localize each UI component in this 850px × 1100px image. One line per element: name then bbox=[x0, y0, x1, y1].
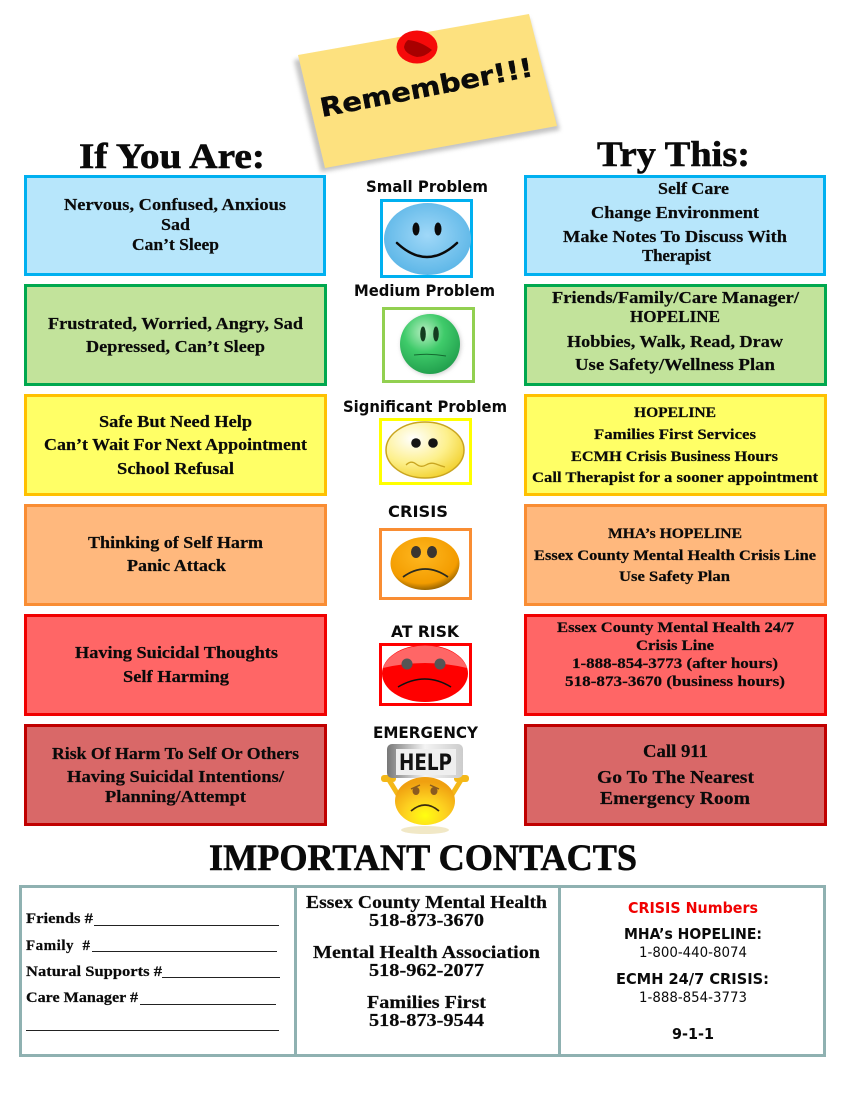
panel: at risk feelings: Having Suicidal Thoughts bbox=[75, 643, 278, 662]
write-in contacts list: Family # bbox=[26, 938, 90, 954]
icon: blue smiling face bbox=[382, 200, 472, 276]
panel: medium problem actions: Hobbies, Walk, Read, Draw bbox=[567, 332, 784, 351]
write-in contacts list bbox=[26, 911, 280, 1031]
panel: significant problem actions: HOPELINE bbox=[634, 405, 716, 421]
icon: help sign face bbox=[381, 744, 469, 834]
panel: at risk actions bbox=[526, 616, 826, 714]
panel: significant problem feelings: School Refusal bbox=[117, 459, 234, 478]
panel: emergency actions: Emergency Room bbox=[600, 788, 750, 808]
panel: small problem feelings: Nervous, Confused, Anxious bbox=[64, 195, 286, 214]
local agency contacts: 518-873-9544 bbox=[369, 1010, 484, 1030]
panel: medium problem actions: Friends/Family/Care Manager/ bbox=[552, 288, 799, 307]
label: CRISIS: CRISIS bbox=[388, 502, 448, 521]
panel: crisis feelings bbox=[26, 506, 326, 604]
panel: small problem actions: Make Notes To Discuss With bbox=[563, 227, 788, 246]
panel: emergency actions: Go To The Nearest bbox=[597, 767, 754, 787]
panel: small problem actions bbox=[526, 176, 824, 274]
crisis numbers: ECMH 24/7 CRISIS: bbox=[616, 970, 769, 988]
panel: small problem actions: Change Environment bbox=[591, 203, 759, 222]
panel: medium problem feelings: Depressed, Can’t Sleep bbox=[86, 337, 265, 356]
panel: small problem feelings: Sad bbox=[161, 215, 191, 234]
write-in contacts list: Natural Supports # bbox=[26, 964, 163, 980]
panel: crisis feelings: Thinking of Self Harm bbox=[88, 533, 263, 552]
local agency contacts: 518-873-3670 bbox=[369, 910, 484, 930]
panel: crisis feelings: Panic Attack bbox=[127, 556, 227, 575]
panel: medium problem feelings bbox=[26, 286, 326, 384]
panel: small problem feelings bbox=[26, 176, 324, 274]
panel: significant problem actions: Families First Services bbox=[594, 427, 756, 443]
panel: medium problem actions: HOPELINE bbox=[630, 307, 720, 326]
panel: emergency feelings: Planning/Attempt bbox=[105, 787, 246, 806]
panel: at risk actions: 518-873-3670 (business hours) bbox=[565, 674, 785, 690]
panel: emergency feelings: Risk Of Harm To Self Or Others bbox=[52, 744, 299, 763]
panel: at risk feelings: Self Harming bbox=[123, 667, 230, 686]
heading: Try This: Try This: bbox=[597, 134, 750, 174]
panel: emergency actions: Call 911 bbox=[643, 741, 708, 761]
icon: orange sad face bbox=[380, 530, 470, 598]
local agency contacts: Families First bbox=[367, 992, 486, 1012]
crisis numbers: 9-1-1 bbox=[672, 1025, 714, 1043]
panel: small problem actions: Self Care bbox=[658, 179, 729, 198]
panel: small problem feelings: Can’t Sleep bbox=[132, 235, 219, 254]
panel: significant problem feelings: Can’t Wait For Next Appointment bbox=[44, 435, 307, 454]
panel: significant problem feelings: Safe But Need Help bbox=[99, 412, 252, 431]
icon: red sad face bbox=[380, 644, 470, 704]
local agency contacts: 518-962-2077 bbox=[369, 960, 484, 980]
label: EMERGENCY: EMERGENCY bbox=[373, 723, 478, 742]
panel: crisis actions: MHA’s HOPELINE bbox=[608, 526, 742, 542]
icon: help sign face: HELP bbox=[399, 751, 452, 776]
icon: yellow worried face bbox=[380, 420, 470, 484]
panel: medium problem actions bbox=[526, 286, 826, 384]
write-in contacts list: Friends # bbox=[26, 911, 94, 927]
panel: crisis actions: Essex County Mental Health Crisis Line bbox=[534, 548, 816, 564]
panel: significant problem actions: ECMH Crisis Business Hours bbox=[571, 449, 778, 465]
panel: emergency actions bbox=[526, 726, 826, 824]
panel: significant problem actions: Call Therapist for a sooner appointment bbox=[532, 470, 818, 486]
icon: green neutral face bbox=[384, 308, 474, 382]
crisis numbers bbox=[616, 899, 769, 1043]
panel: at risk actions: Essex County Mental Health 24/7 bbox=[557, 620, 795, 636]
contacts table bbox=[20, 886, 824, 1056]
local agency contacts bbox=[306, 892, 547, 1030]
crisis numbers: 1-888-854-3773 bbox=[639, 990, 747, 1006]
panel: at risk actions: Crisis Line bbox=[636, 638, 714, 654]
crisis numbers: CRISIS Numbers bbox=[628, 899, 758, 917]
panel: small problem actions: Therapist bbox=[642, 246, 711, 265]
local agency contacts: Mental Health Association bbox=[313, 942, 540, 962]
heading: IMPORTANT CONTACTS: IMPORTANT CONTACTS bbox=[209, 838, 637, 879]
panel: emergency feelings bbox=[26, 726, 326, 824]
label: Medium Problem: Medium Problem bbox=[354, 281, 495, 300]
heading: If You Are: If You Are: bbox=[79, 136, 265, 176]
crisis numbers: MHA’s HOPELINE: bbox=[624, 925, 762, 943]
panel: crisis actions: Use Safety Plan bbox=[619, 569, 731, 585]
panel: significant problem actions bbox=[526, 396, 826, 494]
panel: at risk feelings bbox=[26, 616, 326, 714]
label: Small Problem: Small Problem bbox=[366, 177, 488, 196]
label: AT RISK: AT RISK bbox=[391, 622, 460, 641]
local agency contacts: Essex County Mental Health bbox=[306, 892, 547, 912]
panel: crisis actions bbox=[526, 506, 826, 604]
label: Significant Problem: Significant Problem bbox=[343, 397, 507, 416]
sticky note: Remember!!!: Remember!!! bbox=[318, 53, 535, 124]
panel: medium problem actions: Use Safety/Wellness Plan bbox=[575, 355, 776, 374]
panel: emergency feelings: Having Suicidal Intentions/ bbox=[67, 767, 284, 786]
sticky note: Remember!!! bbox=[294, 14, 560, 172]
panel: at risk actions: 1-888-854-3773 (after hours) bbox=[572, 656, 778, 672]
panel: significant problem feelings bbox=[26, 396, 326, 494]
write-in contacts list: Care Manager # bbox=[26, 990, 139, 1006]
panel: medium problem feelings: Frustrated, Worried, Angry, Sad bbox=[48, 314, 304, 333]
crisis numbers: 1-800-440-8074 bbox=[639, 945, 747, 961]
